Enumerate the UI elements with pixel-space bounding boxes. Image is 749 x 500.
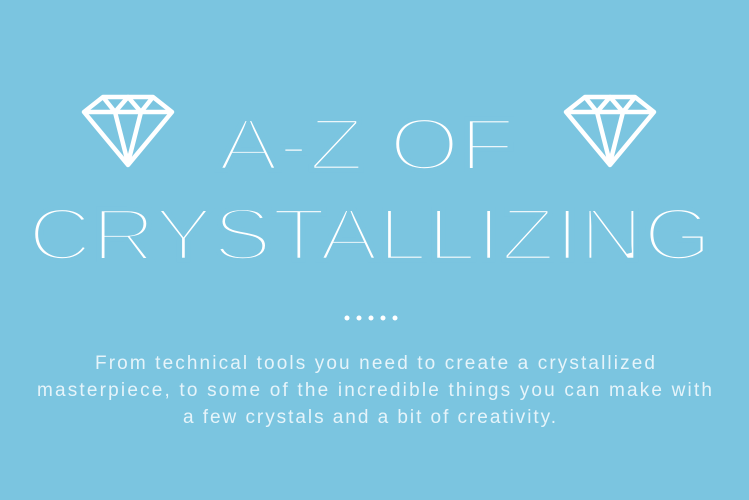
text block: intro: From technical tools you need to create a crystallized xyxy=(95,353,655,374)
text block: intro: masterpiece, to some of the incredible things you can make with xyxy=(37,380,712,401)
text block: intro: a few crystals and a bit of creativity. xyxy=(183,407,556,428)
title xyxy=(28,103,712,276)
title: A-Z OF xyxy=(218,103,515,186)
title: CRYSTALLIZING xyxy=(28,193,712,276)
icon: left diamond xyxy=(84,97,172,165)
icon: right diamond xyxy=(566,97,654,165)
text block: intro xyxy=(37,353,712,428)
dots divider xyxy=(344,316,398,320)
